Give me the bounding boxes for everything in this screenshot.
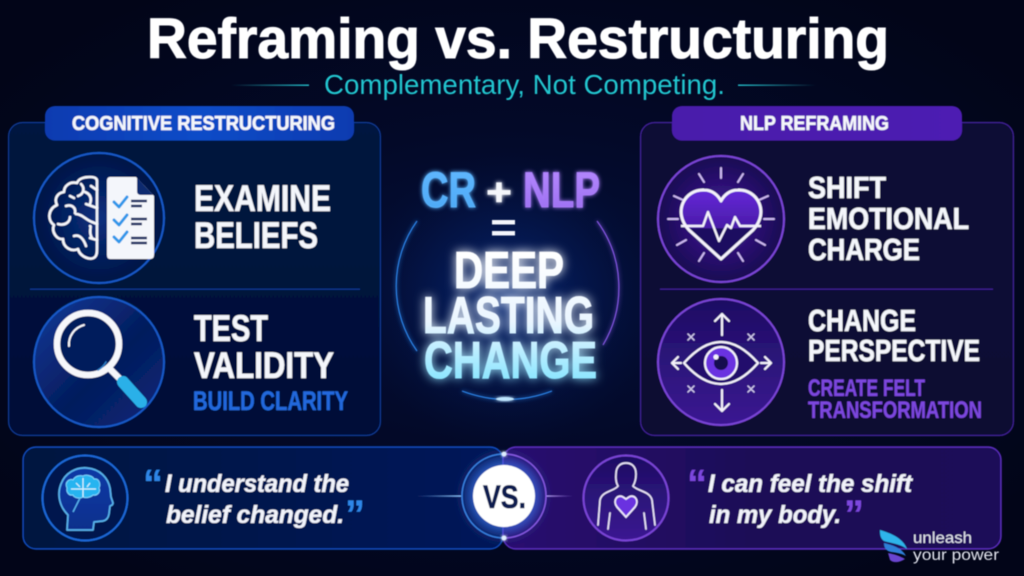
subtitle: Complementary, Not Competing.: [324, 69, 725, 100]
vs badge: [417, 452, 573, 540]
icon: eye with arrows: [658, 299, 784, 425]
text: deep lasting change: DEEP: [454, 242, 564, 300]
quote: i can feel: ”: [844, 493, 864, 537]
label: test validity: TEST: [194, 308, 268, 349]
icon: body with heart: [584, 456, 668, 540]
panel: nlp reframing: [640, 106, 1014, 436]
quote: i can feel: in my body.: [709, 501, 841, 529]
title: Reframing vs. Restructuring: [147, 7, 889, 71]
icon: head with brain: [42, 456, 128, 540]
quote: i understand: I understand the: [165, 470, 349, 498]
quote: i can feel: “: [687, 462, 707, 506]
text: deep lasting change: LASTING: [423, 287, 594, 345]
label: build clarity: BUILD CLARITY: [193, 386, 348, 416]
label: shift emotional charge: [808, 170, 969, 267]
label: create felt transformation: [808, 375, 982, 424]
tab: nlp reframing: [672, 106, 962, 140]
text: cr + nlp: CR: [421, 162, 476, 218]
text: cr + nlp: [421, 162, 600, 218]
label: test validity: [194, 308, 334, 386]
label: examine beliefs: [194, 178, 331, 256]
logo: unleash your power: unleash: [913, 530, 972, 547]
tab: cognitive restructuring: [45, 106, 354, 140]
quote: i understand: ”: [345, 493, 365, 537]
text: deep lasting change: [423, 242, 597, 390]
label: test validity: VALIDITY: [194, 345, 334, 386]
quote: i understand: “: [143, 462, 163, 506]
center equation: [396, 162, 619, 401]
quote: i can feel: [687, 462, 914, 537]
text: deep lasting change: CHANGE: [424, 332, 597, 390]
quote panel: understanding: [23, 447, 503, 549]
icon: magnifying glass: [34, 297, 164, 427]
glowing ring: [396, 221, 619, 400]
vs badge: VS.: [483, 479, 526, 515]
label: shift emotional charge: SHIFT: [808, 170, 886, 205]
label: examine beliefs: EXAMINE: [194, 178, 331, 219]
quote: i understand: belief changed.: [166, 501, 344, 529]
logo: unleash your power: [880, 530, 999, 564]
label: change perspective: CHANGE: [808, 303, 916, 338]
tab: cognitive restructuring: COGNITIVE RESTRUCTURING: [72, 113, 335, 135]
label: change perspective: [808, 303, 980, 368]
label: shift emotional charge: EMOTIONAL: [808, 201, 969, 236]
label: create felt transformation: CREATE FELT: [808, 375, 925, 402]
text: cr + nlp: +: [486, 172, 512, 214]
quote: i understand: [143, 462, 365, 537]
label: shift emotional charge: CHARGE: [808, 232, 920, 267]
quote panel: feeling: [503, 447, 1001, 549]
equals sign: [492, 220, 515, 236]
label: examine beliefs: BELIEFS: [194, 215, 318, 256]
text: cr + nlp: NLP: [523, 162, 600, 218]
tab: nlp reframing: NLP REFRAMING: [740, 113, 889, 135]
icon: heart with pulse: [658, 156, 784, 282]
label: change perspective: PERSPECTIVE: [808, 333, 980, 368]
panel: cognitive restructuring: [8, 106, 380, 436]
quote: i can feel: I can feel the shift: [708, 470, 914, 498]
icon: brain and checklist: [34, 153, 164, 283]
logo: unleash your power: your power: [913, 547, 999, 564]
